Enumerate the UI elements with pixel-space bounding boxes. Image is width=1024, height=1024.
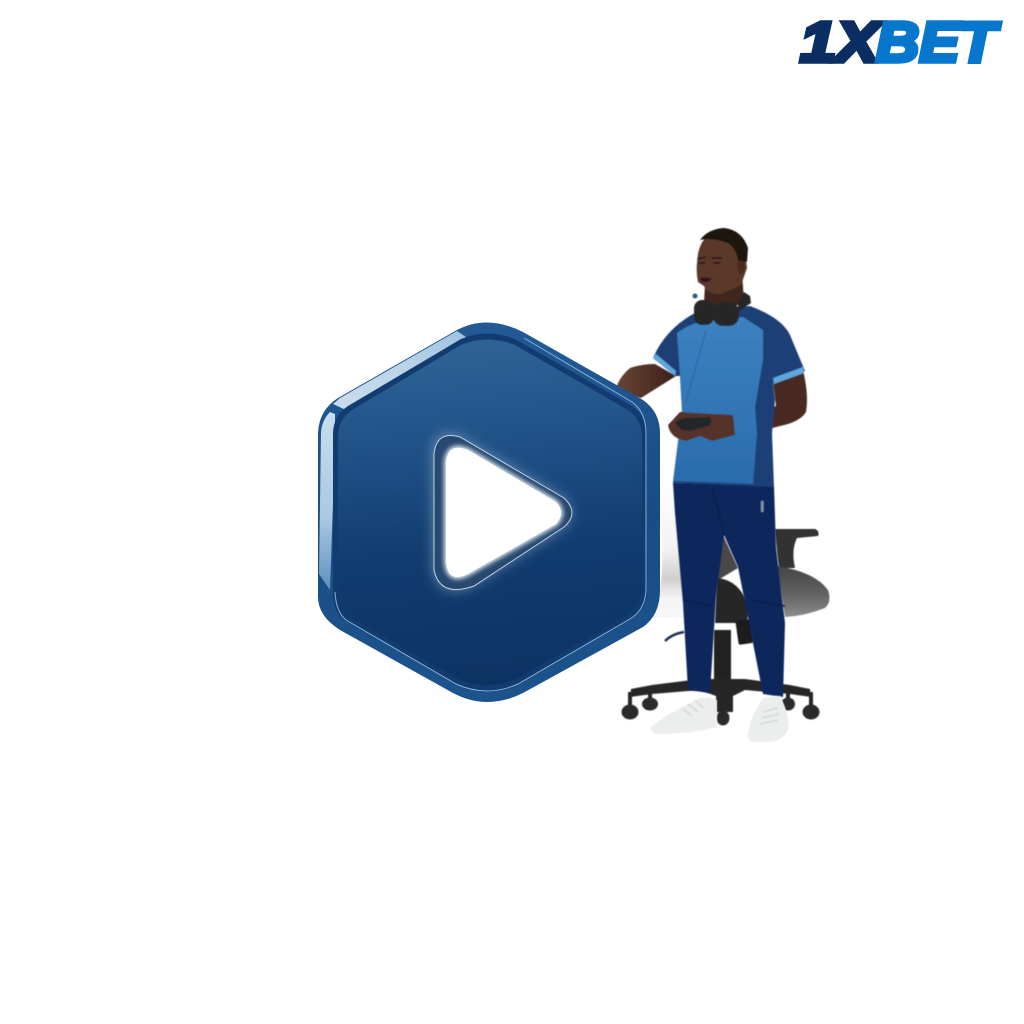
shoe right	[748, 696, 789, 742]
badge diagonal highlight	[333, 331, 466, 410]
person	[615, 228, 807, 742]
badge outer body	[318, 322, 660, 702]
shirt	[653, 306, 805, 487]
lips	[700, 277, 712, 282]
trousers	[673, 483, 785, 697]
chair column	[714, 630, 731, 686]
chair seat centre	[715, 578, 748, 623]
logo text: BET: BET	[876, 10, 1000, 74]
shirt seam	[686, 330, 706, 402]
ear	[737, 258, 745, 274]
shirt front panel	[673, 317, 763, 484]
head	[697, 233, 747, 294]
near arm	[722, 370, 807, 438]
play button recess	[434, 435, 572, 590]
shoe left	[651, 697, 717, 734]
logo text: 1X: 1X	[800, 10, 882, 74]
chair lever	[665, 632, 684, 641]
eyebrows and eyes	[698, 257, 722, 263]
badge bevel	[333, 334, 647, 692]
logo: 1XBET	[800, 10, 1000, 74]
game controller	[675, 417, 711, 431]
hair	[700, 228, 748, 262]
chair wheels	[622, 698, 820, 726]
chair wheel stems	[630, 690, 811, 706]
office chair	[622, 480, 829, 726]
badge inner hairline	[335, 338, 646, 691]
play badge	[318, 322, 660, 702]
badge inner face	[338, 340, 642, 685]
play button glow	[434, 435, 570, 590]
shoe left laces	[682, 700, 704, 716]
chair armrest	[775, 529, 819, 568]
play triangle	[446, 448, 561, 577]
trouser creases	[684, 490, 785, 606]
neck	[704, 272, 744, 312]
microphone	[692, 294, 698, 298]
headphones	[694, 292, 751, 326]
play triangle halo	[446, 448, 561, 577]
far arm	[615, 364, 676, 398]
chair back shadow	[716, 535, 738, 580]
shoe right laces	[760, 708, 779, 724]
trouser logo	[761, 501, 764, 512]
sleeve cuffs	[653, 354, 804, 384]
chair backrest	[653, 480, 690, 618]
chair seat	[777, 566, 829, 617]
badge left highlight	[319, 412, 335, 590]
chair base	[630, 679, 811, 712]
chair block	[735, 619, 754, 645]
hands	[668, 412, 735, 441]
